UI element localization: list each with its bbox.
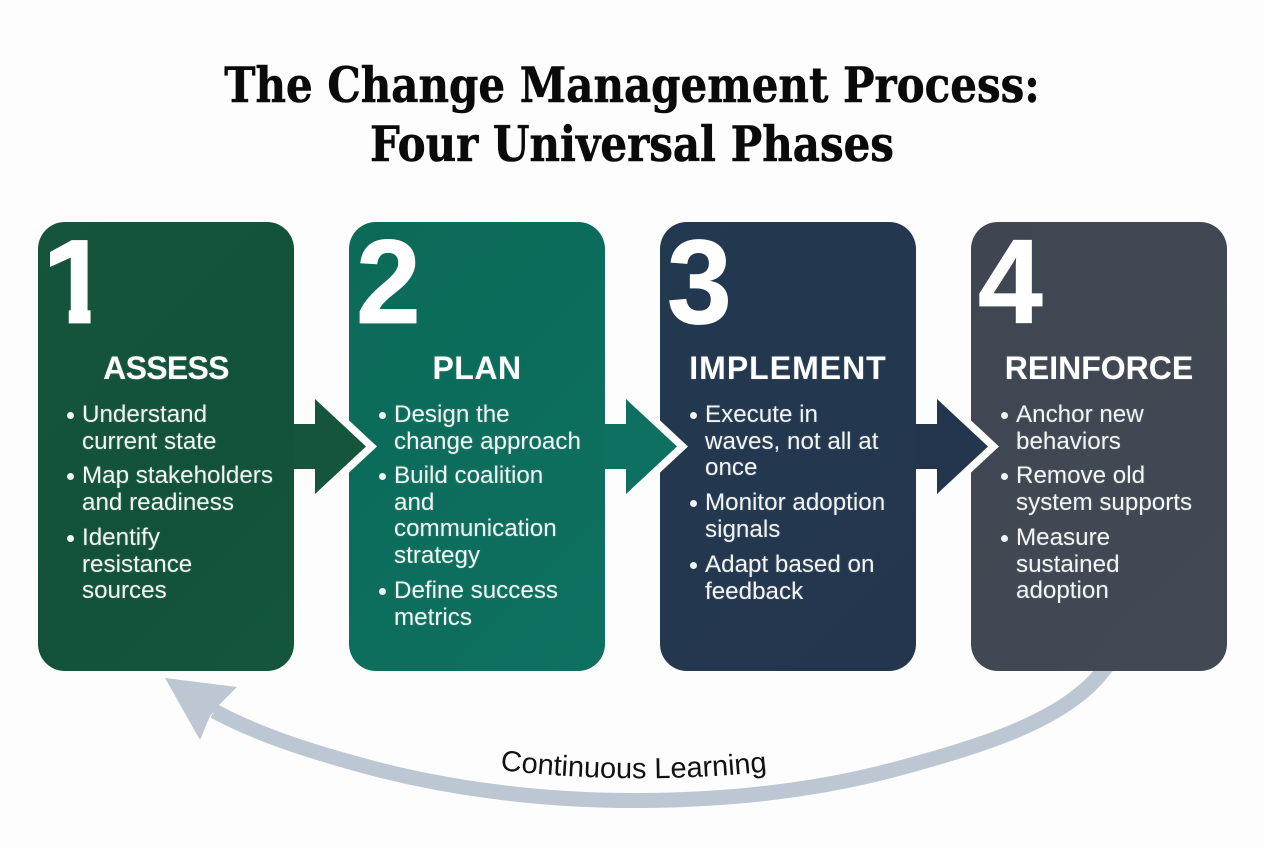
bullet list: implement: Execute in xyxy=(705,401,818,428)
bullet list: reinforce: adoption xyxy=(1016,577,1109,604)
bullet list: plan: Design the xyxy=(394,401,510,428)
bullet list: assess: sources xyxy=(82,577,167,604)
panel: step 1 assess xyxy=(38,222,294,671)
arrow: step 1 to 2 xyxy=(294,399,377,494)
panel: step 4 reinforce xyxy=(971,222,1226,671)
step number 1 flag xyxy=(50,240,72,267)
bullet list: reinforce: system supports xyxy=(1016,488,1192,516)
bullet list: reinforce: Measure xyxy=(1016,524,1110,551)
bullet list: plan: strategy xyxy=(394,542,480,568)
bullet list: reinforce: sustained xyxy=(1016,550,1120,578)
bullet list: assess: resistance xyxy=(82,550,192,578)
panel: step 2 plan xyxy=(349,222,604,671)
arrow: continuous learning loop xyxy=(165,671,1112,808)
bullet list: reinforce: behaviors xyxy=(1016,428,1121,454)
bullet list: implement: feedback xyxy=(705,578,803,604)
bullet list: implement: once xyxy=(705,454,757,481)
bullet list: plan: metrics xyxy=(394,604,472,630)
bullet list: plan: Define success xyxy=(394,577,558,604)
panel: step 3 implement xyxy=(660,222,916,671)
bullet list: implement: signals xyxy=(705,516,780,542)
bullet list: assess: Identify xyxy=(82,524,160,551)
bullet list: assess: current state xyxy=(82,428,216,454)
bullet list: assess: Understand xyxy=(82,401,207,428)
bullet list: implement: Monitor adoption xyxy=(705,489,885,516)
bullet list: implement: Adapt based on xyxy=(705,551,874,578)
bullet list: reinforce: Remove old xyxy=(1016,462,1145,489)
bullet list: assess: and readiness xyxy=(82,488,234,516)
bullet list: plan: and xyxy=(394,488,434,516)
arrow: step 2 to 3 xyxy=(605,399,688,494)
bullet list: implement xyxy=(690,401,885,604)
title: Four Universal Phases xyxy=(370,115,894,173)
title: The Change Management Process: xyxy=(224,56,1040,114)
heading: assess: ASSESS xyxy=(103,350,229,386)
bullet list: plan xyxy=(379,401,581,630)
bullet list: plan: communication xyxy=(394,515,557,542)
arrow: step 3 to 4 xyxy=(916,399,999,494)
title xyxy=(224,56,1040,173)
heading: reinforce: REINFORCE xyxy=(1005,350,1193,386)
bullet list: implement: waves, not all at xyxy=(705,428,878,454)
heading: plan: PLAN xyxy=(432,350,522,386)
bullet list: reinforce: Anchor new xyxy=(1016,401,1144,428)
loop label: Continuous Learning xyxy=(502,751,766,778)
bullet list: assess xyxy=(67,401,273,604)
bullet list: plan: Build coalition xyxy=(394,462,543,489)
heading: implement: IMPLEMENT xyxy=(689,350,887,386)
bullet list: reinforce xyxy=(1001,401,1192,604)
bullet list: plan: change approach xyxy=(394,428,581,454)
bullet list: assess: Map stakeholders xyxy=(82,462,273,489)
